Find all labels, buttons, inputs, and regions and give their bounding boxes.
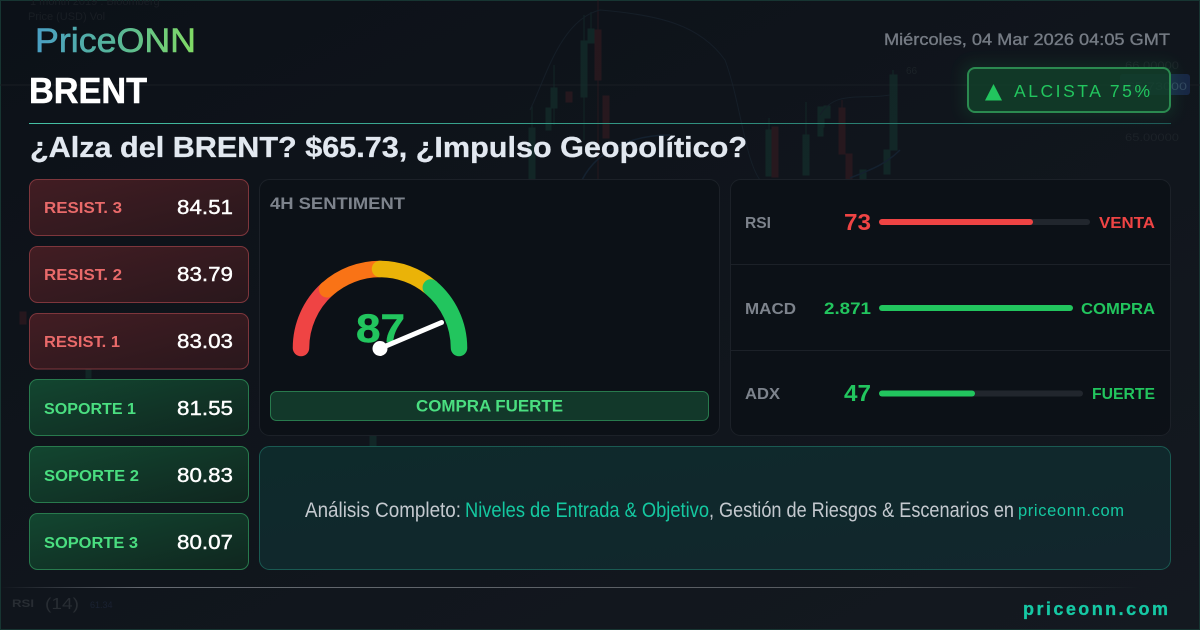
logo: PriceONN: PriceONN [35, 22, 196, 60]
panel: call to action [260, 446, 1170, 570]
footer divider [0, 587, 1200, 588]
indicator: RSI: 73 [844, 209, 871, 235]
indicator: MACD: MACD [745, 301, 796, 318]
level: Resist. 2 [30, 246, 248, 302]
icon: up triangle [985, 84, 1002, 100]
header divider [29, 123, 1171, 124]
headline: ¿Alza del BRENT? $65.73, ¿Impulso Geopolítico? [30, 132, 747, 164]
level: Resist. 1: 83.03 [177, 330, 233, 353]
background chart: RSI [12, 598, 34, 610]
background chart: 66 [906, 66, 918, 77]
indicator: ADX [745, 380, 1155, 406]
call to action text: , Gestión de Riesgos & Escenarios en [709, 499, 1014, 522]
level: Soporte 2: SOPORTE 2 [44, 468, 139, 485]
footer brand: priceonn.com [1023, 599, 1168, 619]
level: Soporte 3 [30, 514, 248, 570]
background chart: 65.00000 [1125, 132, 1179, 144]
indicator: MACD: 2.871 [824, 299, 871, 318]
level: Resist. 3: 84.51 [177, 196, 233, 219]
background chart: 65.73000 [1127, 81, 1187, 93]
indicator: RSI [745, 209, 1155, 235]
date: Miércoles, 04 Mar 2026 04:05 GMT [884, 31, 1170, 49]
level: Soporte 3: SOPORTE 3 [44, 535, 138, 552]
level: Resist. 1: RESIST. 1 [44, 334, 120, 351]
panel: 4H sentiment gauge [260, 180, 720, 436]
symbol heading: BRENT [29, 70, 147, 111]
call to action text: Niveles de Entrada & Objetivo [465, 499, 709, 522]
level: Resist. 3: RESIST. 3 [44, 200, 122, 217]
background chart: (14) [45, 596, 79, 613]
level: Resist. 2: RESIST. 2 [44, 267, 122, 284]
panel: resistance and support levels [30, 180, 248, 570]
background chart: Price (USD) Vol [28, 11, 105, 23]
badge: bullish 75% [962, 62, 1176, 118]
indicator: RSI: RSI [745, 215, 771, 232]
level: Resist. 1 [30, 314, 248, 369]
level: Resist. 3 [30, 180, 248, 236]
indicator: ADX: ADX [745, 386, 780, 403]
panel: indicators [730, 180, 1170, 436]
level: Soporte 1: SOPORTE 1 [44, 401, 136, 418]
indicator: MACD: COMPRA [1081, 301, 1155, 318]
background chart: 66.00000 [1125, 60, 1179, 72]
call to action text [305, 499, 1124, 522]
gauge needle [372, 322, 442, 356]
verdict: compra fuerte [270, 392, 708, 420]
indicator: RSI: VENTA [1099, 215, 1155, 232]
call to action text: Análisis Completo: [305, 499, 461, 522]
indicator: ADX: FUERTE [1092, 386, 1155, 403]
background chart: 61.34 [90, 600, 113, 610]
indicator: ADX: 47 [844, 380, 871, 406]
gauge arc [301, 269, 459, 348]
level: Soporte 1 [30, 380, 248, 436]
call to action text: priceonn.com [1018, 502, 1124, 520]
panel heading: 4H SENTIMENT [270, 195, 405, 213]
gauge value: 87 [356, 307, 405, 351]
verdict: compra fuerte: COMPRA FUERTE [416, 398, 563, 416]
level: Resist. 2: 83.79 [177, 263, 233, 286]
level: Soporte 3: 80.07 [177, 531, 233, 554]
level: Soporte 2 [30, 446, 248, 502]
badge label: ALCISTA 75% [1014, 81, 1150, 101]
indicator: MACD [745, 299, 1155, 318]
level: Soporte 2: 80.83 [177, 464, 233, 487]
level: Soporte 1: 81.55 [177, 397, 233, 420]
